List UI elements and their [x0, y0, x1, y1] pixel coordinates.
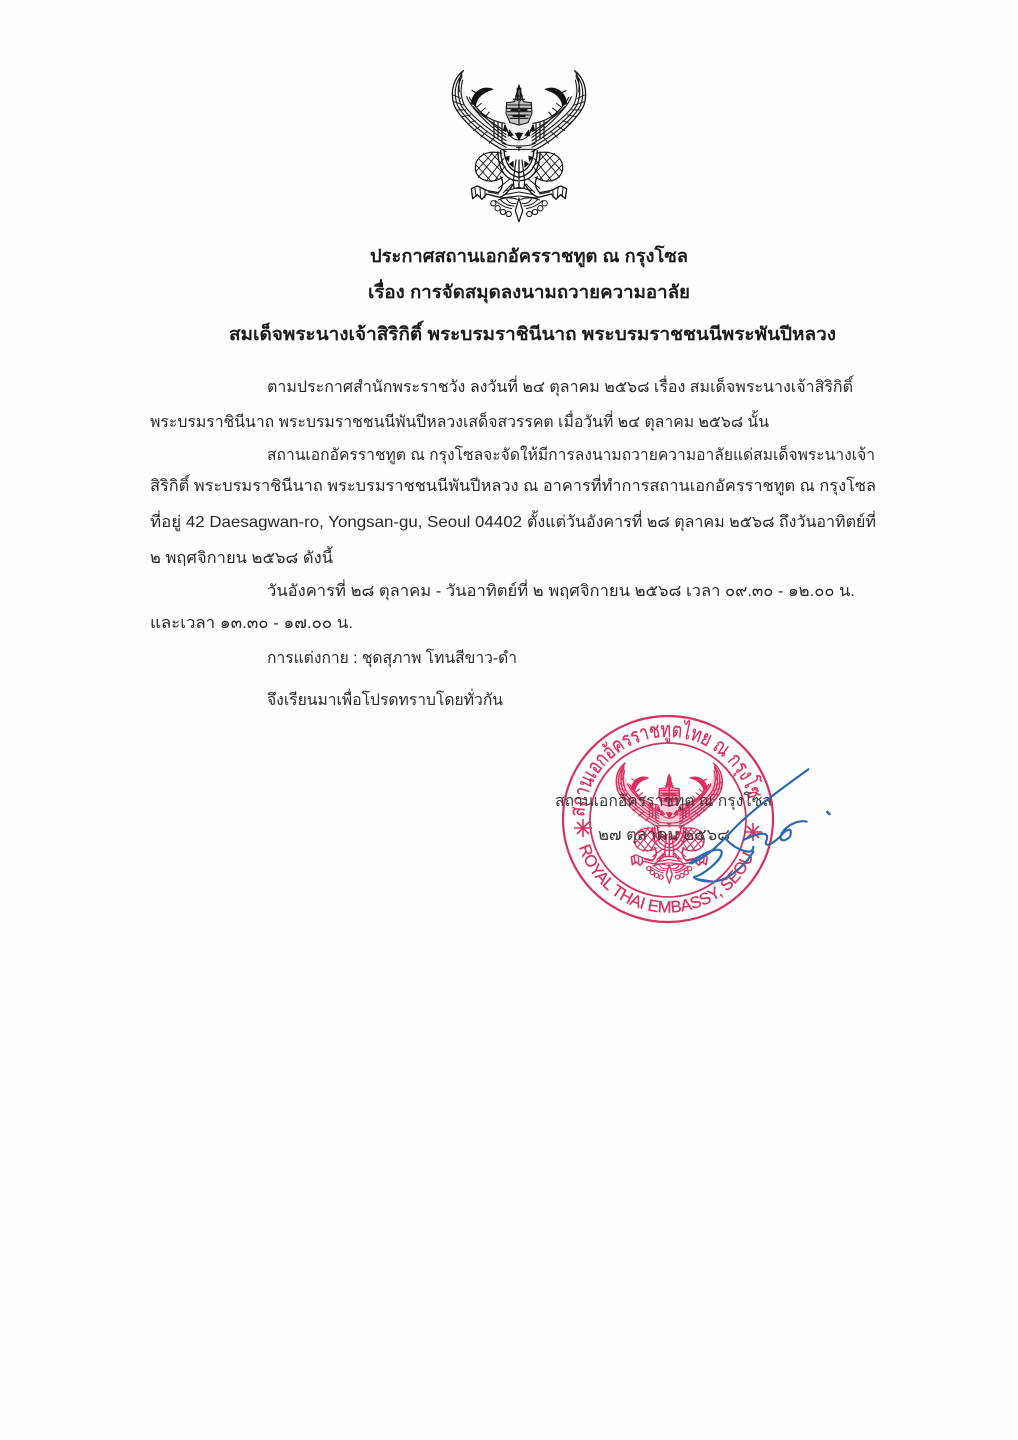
body text: announcement reference: ตามประกาศสำนักพระราชวัง ลงวันที่ ๒๔ ตุลาคม ๒๕๖๘ เรื่อง สมเด็จพระนางเจ้าสิริกิติ์ [267, 375, 855, 397]
body text: condolence book arrangement: ที่อยู่ 42 Daesagwan-ro, Yongsan-gu, Seoul 04402 [150, 510, 522, 532]
title block [229, 245, 836, 344]
seal English inscription: ROYAL THAI EMBASSY, SEOUL [579, 844, 752, 913]
body text: dress code: การแต่งกาย : ชุดสุภาพ โทนสีขาว-ดำ [267, 648, 517, 668]
signature block text: ๒๗ ตุลาคม ๒๕๖๘ [598, 827, 730, 845]
signature block text [555, 791, 772, 845]
seal rings [563, 716, 773, 922]
body text: announcement reference [150, 375, 855, 432]
seal Thai inscription: สถานเอกอัครราชทูตไทย ณ กรุงโซล [572, 720, 763, 816]
seal garuda [616, 763, 723, 883]
title line 1: ประกาศสถานเอกอัครราชทูต ณ กรุงโซล [370, 245, 688, 268]
title line 3: สมเด็จพระนางเจ้าสิริกิติ์ พระบรมราชินีนาถ พระบรมราชชนนีพระพันปีหลวง [229, 320, 836, 344]
blue handwritten signature [690, 769, 829, 882]
body text: condolence book arrangement: ๒ พฤศจิกายน ๒๕๖๘ ดังนี้ [150, 546, 333, 567]
seal right star [744, 823, 762, 841]
embassy seal [562, 714, 774, 924]
signature block text: สถานเอกอัครราชทูต ณ กรุงโซล [555, 791, 772, 811]
body text: condolence book arrangement [150, 444, 876, 567]
body text: dates and times: และเวลา ๑๓.๓๐ - ๑๗.๐๐ น. [150, 615, 353, 632]
body text: announcement reference: พระบรมราชินีนาถ พระบรมราชชนนีพันปีหลวงเสด็จสวรรคต เมื่อวันที่ ๒๔ ตุลาคม ๒๕๖๘ นั้น [150, 410, 769, 432]
seal left star [574, 819, 592, 837]
icon: Thai garuda emblem [452, 71, 586, 222]
body text: condolence book arrangement: สิริกิติ์ พระบรมราชินีนาถ พระบรมราชชนนีพันปีหลวง ณ อาคารที่ทำการสถานเอกอัครราชทูต ณ กรุงโซล [150, 474, 876, 496]
title line 2: เรื่อง การจัดสมุดลงนามถวายความอาลัย [368, 279, 690, 304]
body text: dates and times: วันอังคารที่ ๒๘ ตุลาคม - วันอาทิตย์ที่ ๒ พฤศจิกายน ๒๕๖๘ เวลา ๐๙.๓๐ - ๑๒.๐๐ น. [267, 579, 855, 601]
body text: condolence book arrangement: สถานเอกอัครราชทูต ณ กรุงโซลจะจัดให้มีการลงนามถวายความอาลัยแด่สมเด็จพระนางเจ้า [267, 444, 875, 465]
body text: closing: จึงเรียนมาเพื่อโปรดทราบโดยทั่วกัน [267, 688, 503, 709]
body text: condolence book arrangement: ตั้งแต่วันอังคารที่ ๒๘ ตุลาคม ๒๕๖๘ ถึงวันอาทิตย์ที่ [527, 510, 876, 532]
body text: dates and times [150, 579, 855, 632]
